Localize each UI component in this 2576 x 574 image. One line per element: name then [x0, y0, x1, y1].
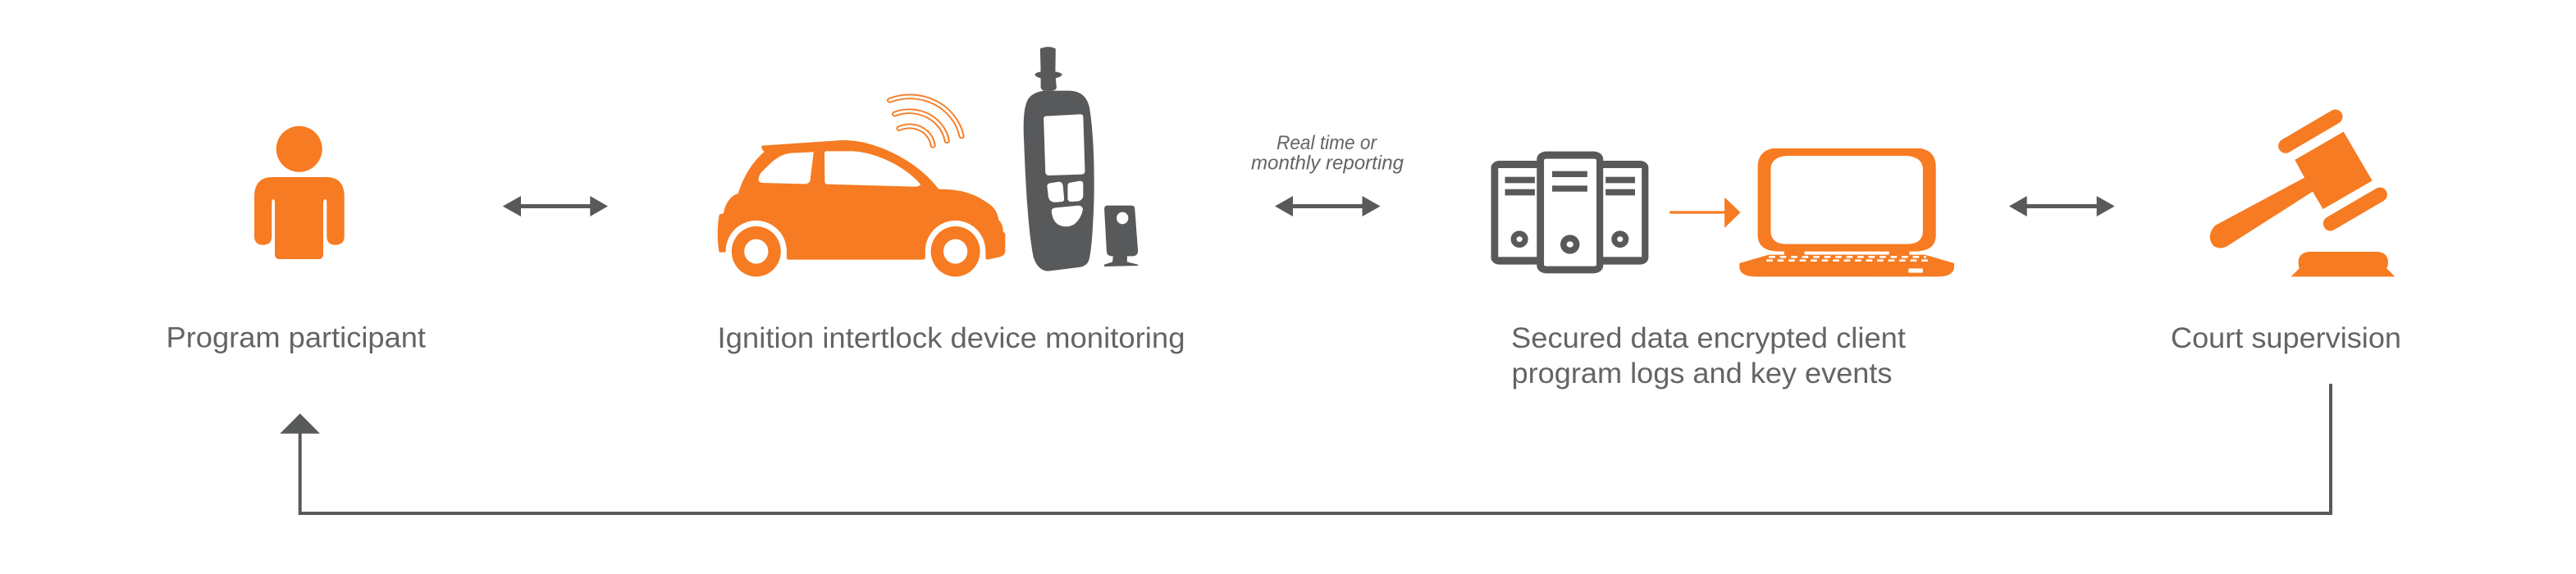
centre server: [1537, 152, 1603, 273]
icon: program participant: [254, 126, 345, 259]
label: secured data: program logs and key events: [1511, 358, 1892, 390]
keyboard keys: [1766, 257, 1931, 261]
car body: [718, 140, 1005, 260]
left server: [1491, 161, 1544, 265]
icon: gavel: [2210, 116, 2395, 276]
laptop hinge: [1784, 251, 1909, 256]
label: secured data: Secured data encrypted client: [1511, 322, 1906, 354]
arrow: laptop to court: [2009, 196, 2115, 216]
icon: breathalyzer handset and camera: [1024, 47, 1138, 271]
rear wheel: [732, 226, 781, 276]
icon: car with wireless signal: [718, 97, 1005, 276]
icon: servers: [1491, 152, 1648, 273]
laptop screen: [1758, 148, 1936, 252]
label: program participant: Program participant: [166, 321, 426, 354]
icon: laptop: [1739, 148, 1954, 276]
caption: reporting frequency: [1251, 132, 1404, 174]
mouthpiece: [1035, 47, 1062, 91]
touchpad: [1908, 268, 1923, 273]
caption: reporting frequency: Real time or: [1277, 132, 1377, 154]
caption: reporting frequency: monthly reporting: [1251, 153, 1404, 174]
arrow: servers to laptop: [1669, 198, 1740, 228]
gavel head and handle: [2210, 132, 2373, 248]
right server: [1596, 161, 1648, 265]
sound block: [2291, 252, 2395, 276]
arrow: device to servers: [1275, 196, 1380, 216]
label: court supervision: Court supervision: [2171, 322, 2401, 354]
handset body: [1024, 91, 1094, 271]
wireless signal arcs: [890, 97, 961, 145]
arrow: participant to device: [503, 196, 608, 216]
arrow: feedback from court to participant: [280, 384, 2331, 513]
gavel top band: [2286, 116, 2336, 146]
label: device monitoring: Ignition intertlock device monitoring: [717, 322, 1185, 354]
laptop base: [1739, 255, 1954, 276]
front wheel: [931, 226, 980, 276]
gavel bottom band: [2331, 194, 2380, 224]
camera unit: [1104, 206, 1138, 266]
label: secured data: [1511, 322, 1906, 390]
